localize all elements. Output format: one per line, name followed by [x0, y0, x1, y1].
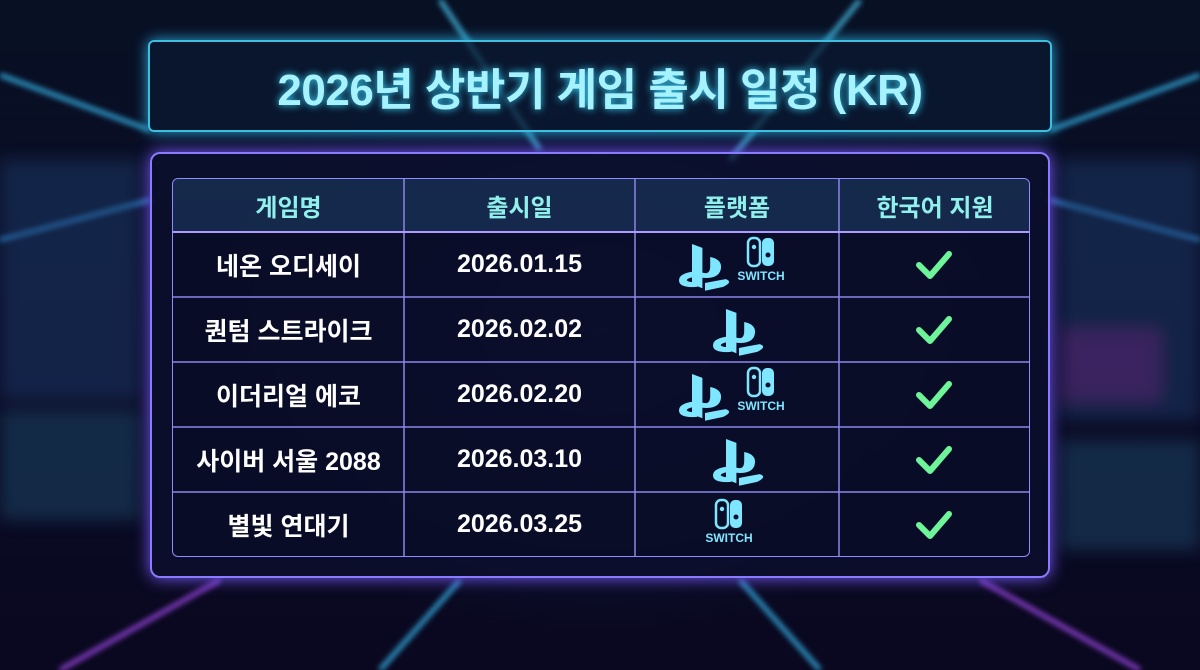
rows: 2026.03.10: [457, 445, 582, 473]
rows: 별빛 연대기: [228, 512, 349, 540]
header row: 플랫폼: [704, 195, 770, 222]
rows: 퀀텀 스트라이크: [205, 318, 372, 346]
table: [172, 178, 1030, 557]
title: 2026년 상반기 게임 출시 일정 (KR): [277, 66, 923, 115]
rows: 2026.02.20: [457, 380, 582, 408]
rows: 사이버 서울 2088: [196, 448, 381, 476]
row1 icons: [679, 238, 785, 291]
row2 icons: [713, 309, 763, 356]
rows: [196, 236, 952, 542]
row5 icons: [705, 500, 753, 545]
rows: 2026.01.15: [457, 250, 582, 278]
row4 icons: [713, 439, 763, 486]
table panel: [150, 152, 1050, 578]
rows: 네온 오디세이: [216, 252, 361, 280]
check marks: [916, 251, 952, 539]
header row: 한국어 지원: [876, 195, 994, 222]
header row: [255, 195, 994, 222]
rows: 이더리얼 에코: [216, 382, 361, 410]
title box: [148, 40, 1052, 132]
rows: 2026.03.25: [457, 510, 582, 538]
header row: 게임명: [255, 195, 322, 222]
platform icons: [679, 236, 784, 542]
rows: 2026.02.02: [457, 315, 582, 343]
row3 icons: [679, 368, 785, 421]
header row: 출시일: [486, 195, 553, 222]
